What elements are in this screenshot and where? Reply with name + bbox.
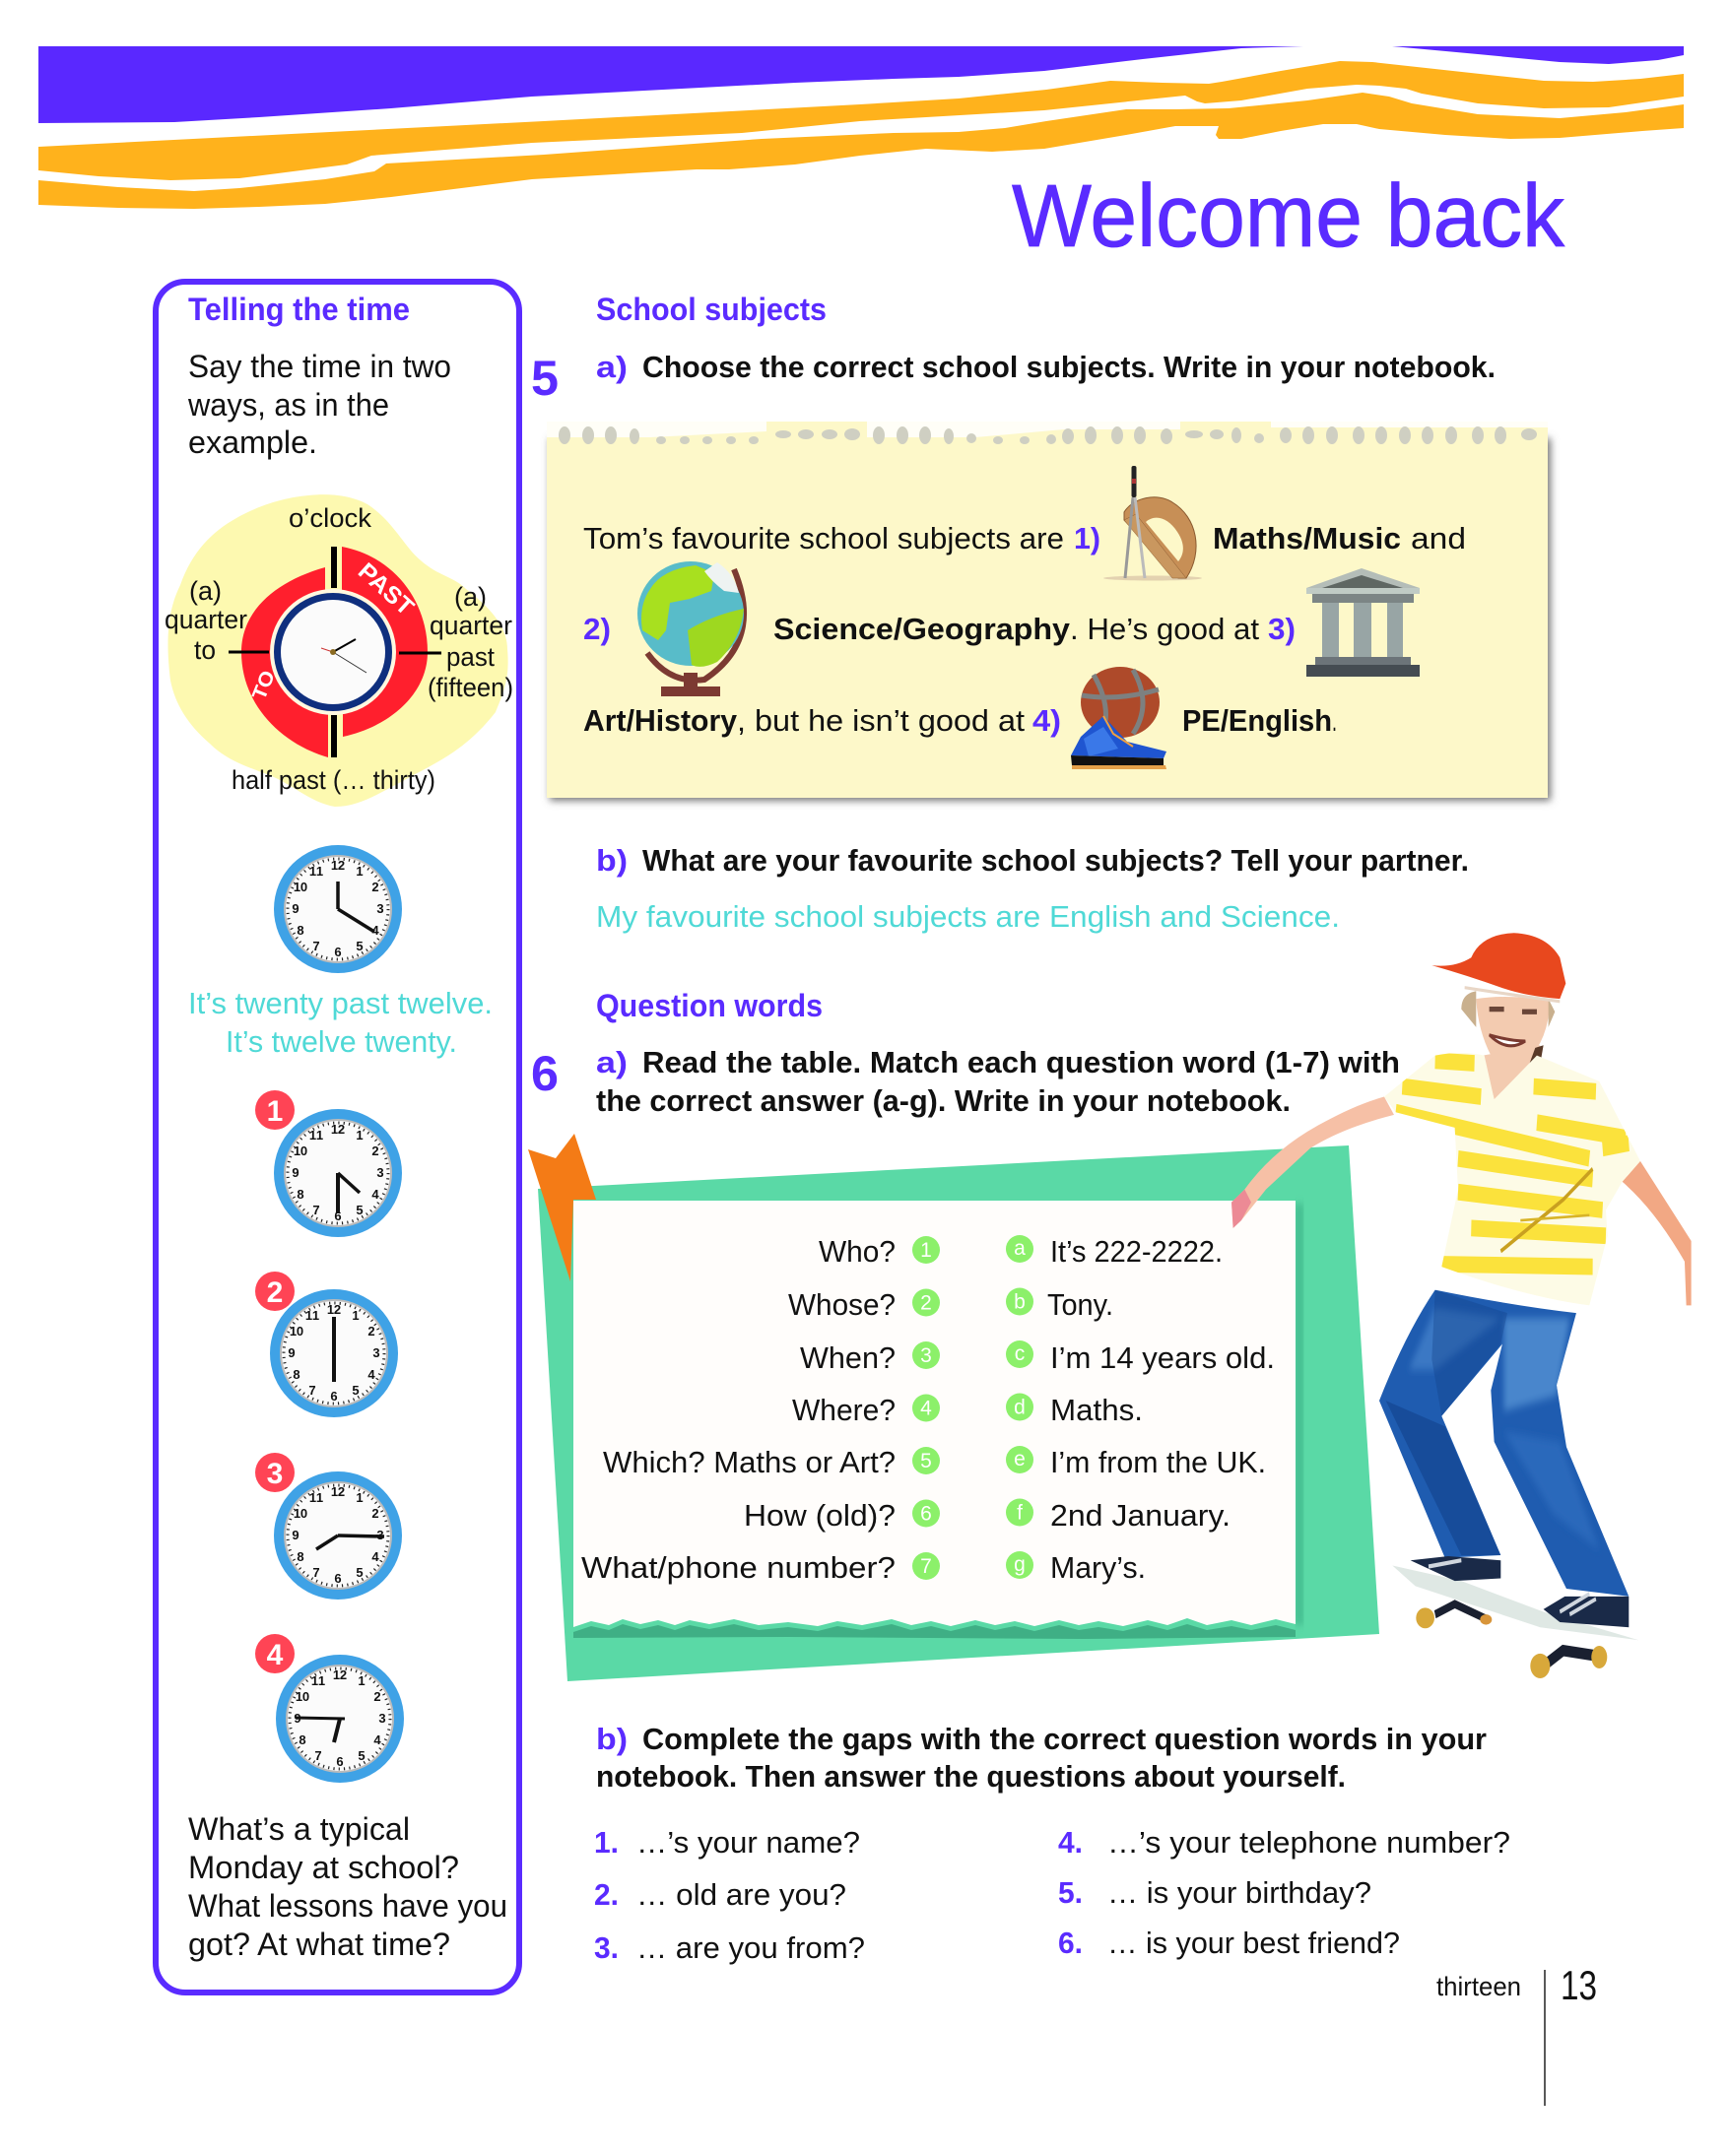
exercise 6a instruction: a): [596, 1045, 628, 1079]
badge 3: 3: [267, 1458, 283, 1490]
clock 4: [276, 1655, 404, 1783]
heading: question words: Question words: [596, 988, 823, 1023]
exercise 5a instruction: Choose the correct school subjects. Write in your notebook.: [642, 350, 1496, 384]
eyes: [1490, 1010, 1537, 1012]
skateboard: [1392, 1565, 1638, 1678]
clock diagram: PAST: [353, 557, 419, 621]
badge 2: 2: [267, 1276, 283, 1309]
answer column: 2nd January.: [1050, 1498, 1231, 1533]
badge 1: [255, 1090, 295, 1130]
gap questions left column: 1.: [594, 1825, 619, 1860]
clock diagram: quarter: [165, 605, 247, 634]
panel heading: Telling the time: [188, 292, 410, 327]
gap questions right column: 6.: [1058, 1926, 1083, 1960]
instructions: ways, as in the: [187, 387, 389, 423]
exercise 5b instruction: b): [596, 843, 628, 878]
answer column: Tony.: [1047, 1287, 1113, 1322]
smile: [1490, 1035, 1525, 1046]
hair: [1461, 991, 1555, 1027]
exercise number 5: 5: [531, 351, 559, 406]
example sentence: My favourite school subjects are English and Science.: [596, 899, 1340, 934]
question column: What/phone number?: [581, 1550, 896, 1585]
clock diagram: to: [194, 635, 216, 665]
clock 3: 123456789101112: [292, 1484, 384, 1586]
clock diagram: (a): [454, 582, 487, 612]
badge 2: [255, 1272, 295, 1311]
answer column: It’s 222-2222.: [1050, 1234, 1223, 1269]
exercise 6b instruction: [596, 1722, 1487, 1794]
clock 1: 123456789101112: [292, 1122, 384, 1223]
clock 1: [274, 1109, 402, 1237]
right arm: [1623, 1161, 1692, 1305]
clock diagram: past: [446, 642, 495, 672]
gap-fill text: [583, 521, 1466, 738]
gap-fill text: , but he isn’t good at: [737, 703, 1025, 738]
exercise 5b instruction: What are your favourite school subjects? Tell your partner.: [642, 843, 1469, 878]
heading: school subjects: School subjects: [596, 292, 827, 327]
clock diagram: [165, 494, 513, 807]
instructions: example.: [188, 425, 317, 460]
clock 2: [270, 1289, 398, 1417]
question column: Whose?: [788, 1287, 896, 1322]
gap questions right column: …’s your telephone number?: [1107, 1825, 1510, 1860]
discussion question: Monday at school?: [188, 1850, 459, 1885]
question column: Where?: [792, 1393, 896, 1427]
gap-fill text: Maths/Music: [1213, 521, 1401, 555]
exercise 6b instruction: notebook. Then answer the questions about yourself.: [596, 1759, 1346, 1794]
shoes: [1411, 1556, 1629, 1627]
clock diagram: (a): [189, 576, 222, 606]
number badges: 2: [920, 1292, 932, 1314]
badge 3: [255, 1453, 295, 1492]
gap questions right column: … is your best friend?: [1107, 1926, 1400, 1960]
answer column: Mary’s.: [1050, 1550, 1146, 1585]
number badges: 3: [920, 1344, 932, 1367]
page number footer: [1436, 1962, 1597, 2106]
question word table: [528, 1134, 1379, 1681]
question column: Who?: [819, 1234, 896, 1269]
example answer: It’s twenty past twelve.: [188, 986, 493, 1020]
t-shirt: [1384, 1053, 1640, 1306]
exercise 6a instruction: Read the table. Match each question word (1-7) with: [642, 1045, 1400, 1079]
letter badges: f: [1017, 1501, 1023, 1525]
page number footer: thirteen: [1436, 1972, 1521, 2001]
exercise 5a instruction: a): [596, 350, 628, 384]
orange flag: [528, 1134, 596, 1281]
answer column: [1047, 1234, 1275, 1585]
icon: compass and protractor: [1103, 466, 1202, 581]
gap-fill text: .: [1332, 703, 1337, 738]
question column: [581, 1234, 896, 1585]
discussion question: What’s a typical: [188, 1811, 410, 1847]
clock diagram: TO: [248, 668, 280, 703]
left arm: [1231, 1097, 1394, 1228]
icon: classical temple: [1306, 568, 1420, 677]
letter badges: g: [1014, 1553, 1026, 1576]
gap-fill text: 4): [1032, 703, 1061, 738]
letter badges: d: [1014, 1397, 1026, 1418]
gap-fill text: 1): [1074, 521, 1100, 555]
letter badges: e: [1014, 1448, 1026, 1470]
exercise 6b instruction: b): [596, 1722, 628, 1756]
answer column: Maths.: [1050, 1393, 1143, 1427]
hand: [1231, 1190, 1251, 1228]
collar shadow: [1529, 1045, 1544, 1074]
letter badges: [1006, 1235, 1033, 1579]
jeans: [1376, 1287, 1632, 1601]
badge 4: 4: [267, 1639, 284, 1671]
instructions: Say the time in two: [188, 349, 451, 384]
gap questions right column: [1058, 1825, 1510, 1960]
gap-fill text: Science/Geography: [773, 612, 1071, 646]
instructions: [187, 349, 451, 460]
answer column: I’m 14 years old.: [1050, 1340, 1275, 1375]
answer column: I’m from the UK.: [1050, 1445, 1266, 1479]
clock 4: 123456789101112: [294, 1667, 386, 1769]
clock diagram: quarter: [430, 611, 512, 640]
letter badges: c: [1015, 1342, 1025, 1365]
number badges: 7: [920, 1555, 932, 1578]
cap: [1431, 933, 1565, 1002]
discussion question: What lessons have you: [188, 1888, 507, 1924]
badge 4: [255, 1634, 295, 1673]
exercise 6a instruction: [596, 1045, 1400, 1118]
gap questions left column: … are you from?: [636, 1930, 865, 1965]
clock 3: [274, 1471, 402, 1600]
example answer: It’s twelve twenty.: [226, 1024, 457, 1059]
note paper: [547, 420, 1552, 801]
gap-fill text: PE/English: [1182, 703, 1332, 738]
photo: boy on skateboard: [1231, 933, 1692, 1678]
exercise 6a instruction: the correct answer (a-g). Write in your notebook.: [596, 1083, 1291, 1118]
clock diagram: o’clock: [289, 503, 372, 533]
gap-fill text: and: [1411, 521, 1466, 555]
gap questions right column: … is your birthday?: [1107, 1875, 1371, 1910]
icon: globe: [637, 561, 744, 696]
example answer: [188, 986, 493, 1059]
clock diagram: (fifteen): [428, 673, 513, 702]
gap-fill text: Art/History: [583, 703, 738, 738]
neck and face: [1476, 997, 1550, 1099]
title: Welcome back: [1012, 167, 1565, 266]
letter badges: b: [1014, 1290, 1026, 1314]
gap-fill text: Tom’s favourite school subjects are: [583, 521, 1064, 555]
question column: When?: [800, 1340, 896, 1375]
example clock: [274, 845, 402, 973]
badge 1: 1: [267, 1095, 283, 1128]
exercise number 6: 6: [531, 1046, 559, 1101]
exercise 6b instruction: Complete the gaps with the correct question words in your: [642, 1722, 1487, 1756]
gap questions left column: [594, 1825, 865, 1965]
icon: basketball and trainer: [1071, 667, 1166, 769]
gap-fill text: 3): [1268, 612, 1296, 646]
gap questions left column: … old are you?: [636, 1877, 846, 1912]
number badges: [912, 1236, 940, 1580]
number badges: 5: [920, 1450, 932, 1472]
number badges: 1: [920, 1239, 932, 1262]
example clock: 123456789101112: [292, 858, 384, 959]
question column: How (old)?: [744, 1498, 896, 1533]
gap questions left column: …’s your name?: [636, 1825, 860, 1860]
clock 2: 123456789101112: [288, 1302, 380, 1404]
gap questions left column: 3.: [594, 1930, 619, 1965]
gap-fill text: 2): [583, 612, 611, 646]
gap questions right column: 4.: [1058, 1825, 1083, 1860]
question column: Which? Maths or Art?: [603, 1445, 896, 1479]
letter badges: a: [1014, 1237, 1026, 1260]
clock diagram: half past (… thirty): [232, 765, 435, 795]
gap questions right column: 5.: [1058, 1875, 1083, 1910]
header wave banner: [38, 46, 1684, 209]
discussion question: got? At what time?: [188, 1927, 450, 1962]
number badges: 4: [920, 1397, 932, 1420]
page number footer: 13: [1561, 1962, 1597, 2008]
gap-fill text: . He’s good at: [1070, 612, 1259, 646]
discussion question: [188, 1811, 507, 1962]
panel: telling the time: [156, 282, 519, 1993]
gap questions left column: 2.: [594, 1877, 619, 1912]
perforated top edge: [547, 420, 1552, 444]
number badges: 6: [920, 1503, 932, 1525]
